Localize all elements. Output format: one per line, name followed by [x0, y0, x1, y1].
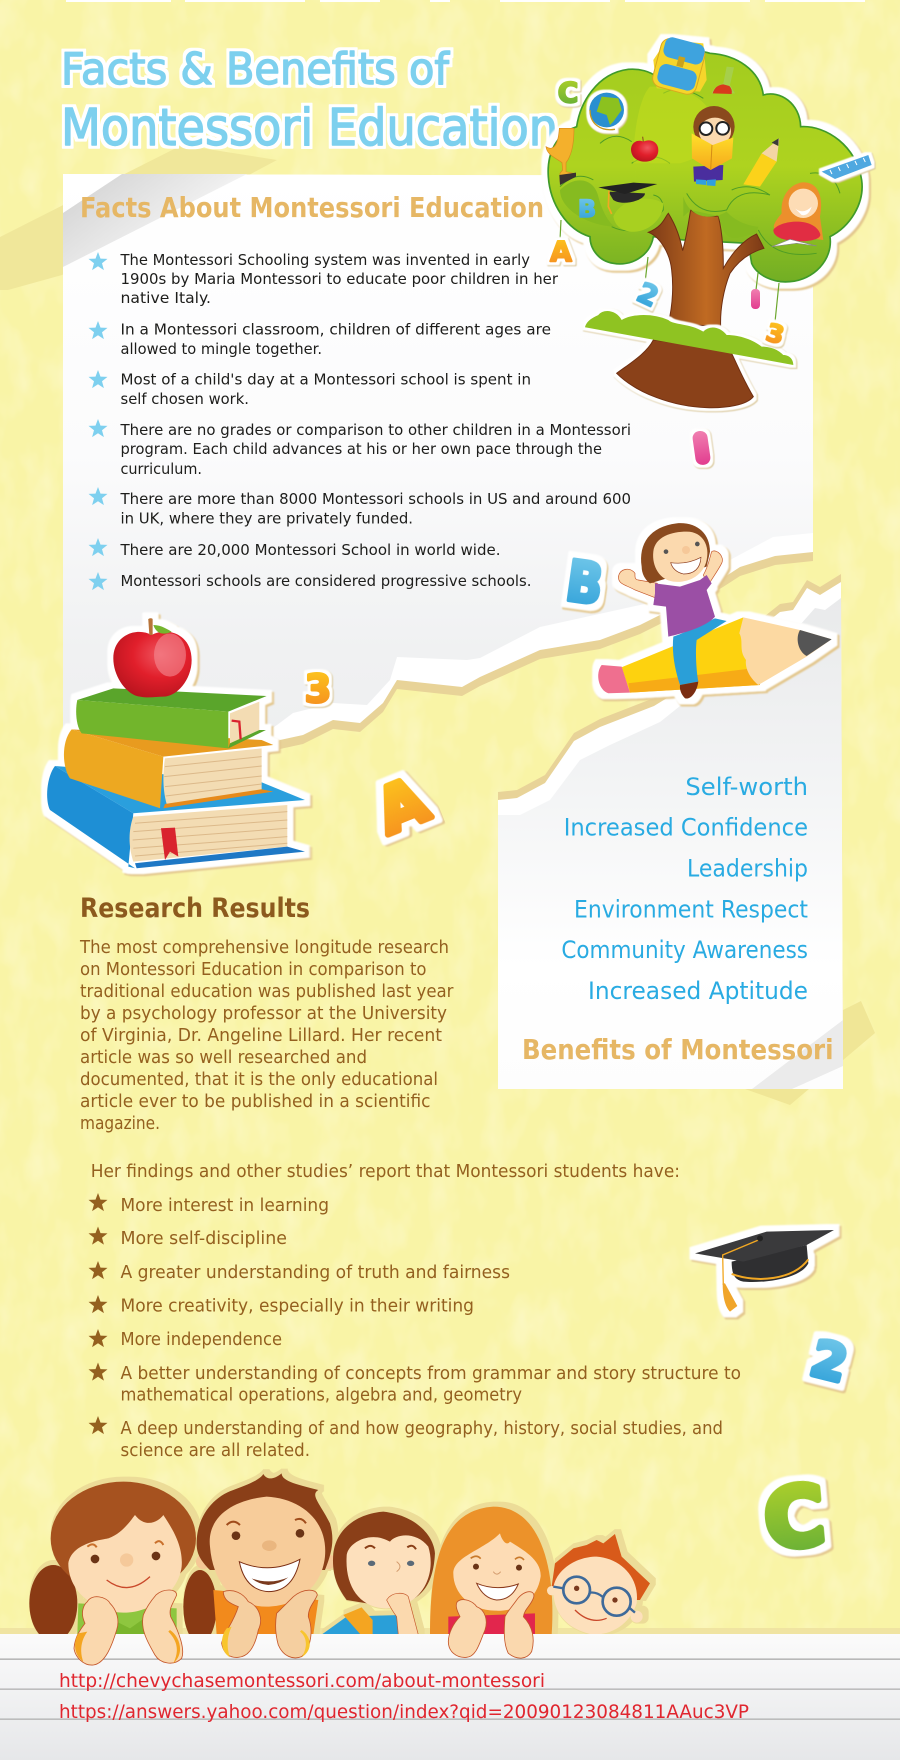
bottom ledge with ruled lines [0, 1634, 900, 1760]
research paragraph: magazine. [80, 1114, 160, 1134]
facts list: There are 20,000 Montessori School in world wide. [120, 541, 500, 559]
benefits list: Increased Aptitude [588, 977, 808, 1005]
number 3 hanging: 3 [763, 318, 787, 350]
facts list: There are no grades or comparison to other children in a Montessori [120, 421, 631, 439]
folded tape shadow, bottom right [745, 1001, 875, 1105]
findings list: A greater understanding of truth and fairness [120, 1263, 510, 1283]
children row: heads and bodies [29, 1473, 650, 1643]
findings list: More interest in learning [120, 1196, 329, 1216]
facts list: There are more than 8000 Montessori schools in US and around 600 [120, 490, 631, 508]
blue book [47, 766, 305, 868]
heading: facts: Facts About Montessori Education [80, 191, 544, 224]
illustration: graduation cap [695, 1230, 834, 1312]
icon: pink number 1 [692, 430, 711, 466]
research paragraph: of Virginia, Dr. Angeline Lillard. Her recent [80, 1026, 442, 1046]
benefits list: Leadership [687, 855, 808, 883]
findings list: A deep understanding of and how geography, history, social studies, and [120, 1419, 723, 1439]
hands of girl with pigtails [74, 1590, 183, 1665]
facts list: self chosen work. [120, 390, 249, 408]
flask [712, 67, 735, 93]
illustration: tree with school objects [546, 35, 872, 408]
findings list: More self-discipline [120, 1229, 287, 1249]
icon: green letter C: C [760, 1469, 829, 1569]
laughing boy [196, 1473, 336, 1635]
letter B on tree: B [578, 195, 596, 223]
reading boy [692, 106, 735, 186]
icon: blue number 2: 2 [805, 1329, 853, 1394]
source links: http://chevychasemontessori.com/about-montessori [59, 1670, 545, 1692]
research paragraph: The most comprehensive longitude research [79, 938, 449, 958]
benefits list: Environment Respect [574, 896, 808, 924]
girl with pigtails [29, 1482, 217, 1643]
facts list: Montessori schools are considered progressive schools. [120, 572, 532, 590]
letter C on tree: C [558, 76, 578, 109]
findings list: A better understanding of concepts from grammar and story structure to [120, 1364, 741, 1384]
number 1 hanging [751, 289, 760, 309]
backpack [651, 35, 735, 96]
thinking boy [322, 1512, 435, 1635]
apple [113, 618, 192, 697]
icon: blue letter B: B [562, 549, 607, 618]
research paragraph: article was so well researched and [80, 1048, 367, 1068]
trophy [546, 128, 658, 185]
findings list: science are all related. [120, 1441, 310, 1461]
seated girl [772, 182, 823, 247]
research paragraph: documented, that it is the only educational [80, 1070, 438, 1090]
facts list: program. Each child advances at his or her own pace through the [120, 440, 602, 458]
folded tape shadow, top left [0, 145, 277, 290]
facts list [88, 251, 631, 590]
source links: https://answers.yahoo.com/question/index?qid=20090123084811AAuc3VP [59, 1701, 749, 1723]
heading: benefits: Benefits of Montessori [522, 1033, 834, 1066]
research paragraph [79, 938, 454, 1134]
research paragraph: by a psychology professor at the University [80, 1004, 447, 1024]
facts list: 1900s by Maria Montessori to educate poor children in her [120, 270, 559, 288]
findings list: More creativity, especially in their writing [120, 1296, 474, 1316]
hands of long haired girl [448, 1592, 534, 1658]
green book [76, 688, 267, 748]
research paragraph: on Montessori Education in comparison to [80, 960, 426, 980]
findings intro: Her findings and other studies’ report that Montessori students have: [91, 1162, 680, 1182]
hands of laughing boy [222, 1590, 317, 1658]
benefits list: Community Awareness [561, 936, 808, 964]
long haired girl [430, 1507, 552, 1635]
letter A hanging: A [550, 235, 572, 268]
research paragraph: article ever to be published in a scientific [80, 1092, 430, 1112]
illustration: stack of books with apple [47, 618, 305, 868]
findings list [88, 1193, 741, 1461]
facts list: In a Montessori classroom, children of different ages are [120, 320, 551, 338]
icon: orange number 3: 3 [305, 667, 331, 711]
pencil on tree [743, 138, 779, 187]
panel: benefits paper sheet [498, 574, 843, 1089]
facts list: curriculum. [120, 460, 202, 478]
number 2 hanging: 2 [632, 275, 664, 313]
boy with glasses [547, 1534, 650, 1635]
icon: orange letter A: A [366, 763, 438, 849]
tree trunk [560, 87, 840, 327]
hanging strings [560, 220, 779, 322]
children's hands over the ledge [74, 1590, 534, 1665]
research paragraph: traditional education was published last year [80, 982, 454, 1002]
facts list: Most of a child's day at a Montessori school is spent in [120, 370, 531, 388]
ruler [822, 155, 872, 179]
orange book [64, 729, 273, 808]
heading: research results: Research Results [80, 893, 310, 924]
benefits list: Self-worth [685, 773, 808, 801]
facts list: in UK, where they are privately funded. [120, 510, 413, 528]
source links [59, 1670, 749, 1723]
graduation cap on tree [598, 183, 657, 214]
globe [589, 93, 624, 130]
strip above the ledge [0, 1628, 900, 1636]
title: Facts & Benefits of [61, 44, 450, 95]
facts list: allowed to mingle together. [120, 340, 322, 358]
facts list: native Italy. [120, 289, 211, 307]
facts list: The Montessori Schooling system was invented in early [120, 251, 530, 269]
apple on tree [631, 140, 658, 162]
illustration: boy riding pencil [598, 523, 832, 699]
tree base and grass [585, 311, 793, 408]
findings list: More independence [120, 1330, 282, 1350]
panel: facts paper sheet [63, 174, 813, 759]
title: Montessori Education [61, 99, 558, 158]
findings list: mathematical operations, algebra and, geometry [120, 1386, 522, 1406]
title [61, 44, 558, 158]
benefits list [561, 773, 808, 1005]
benefits list: Increased Confidence [564, 814, 808, 842]
